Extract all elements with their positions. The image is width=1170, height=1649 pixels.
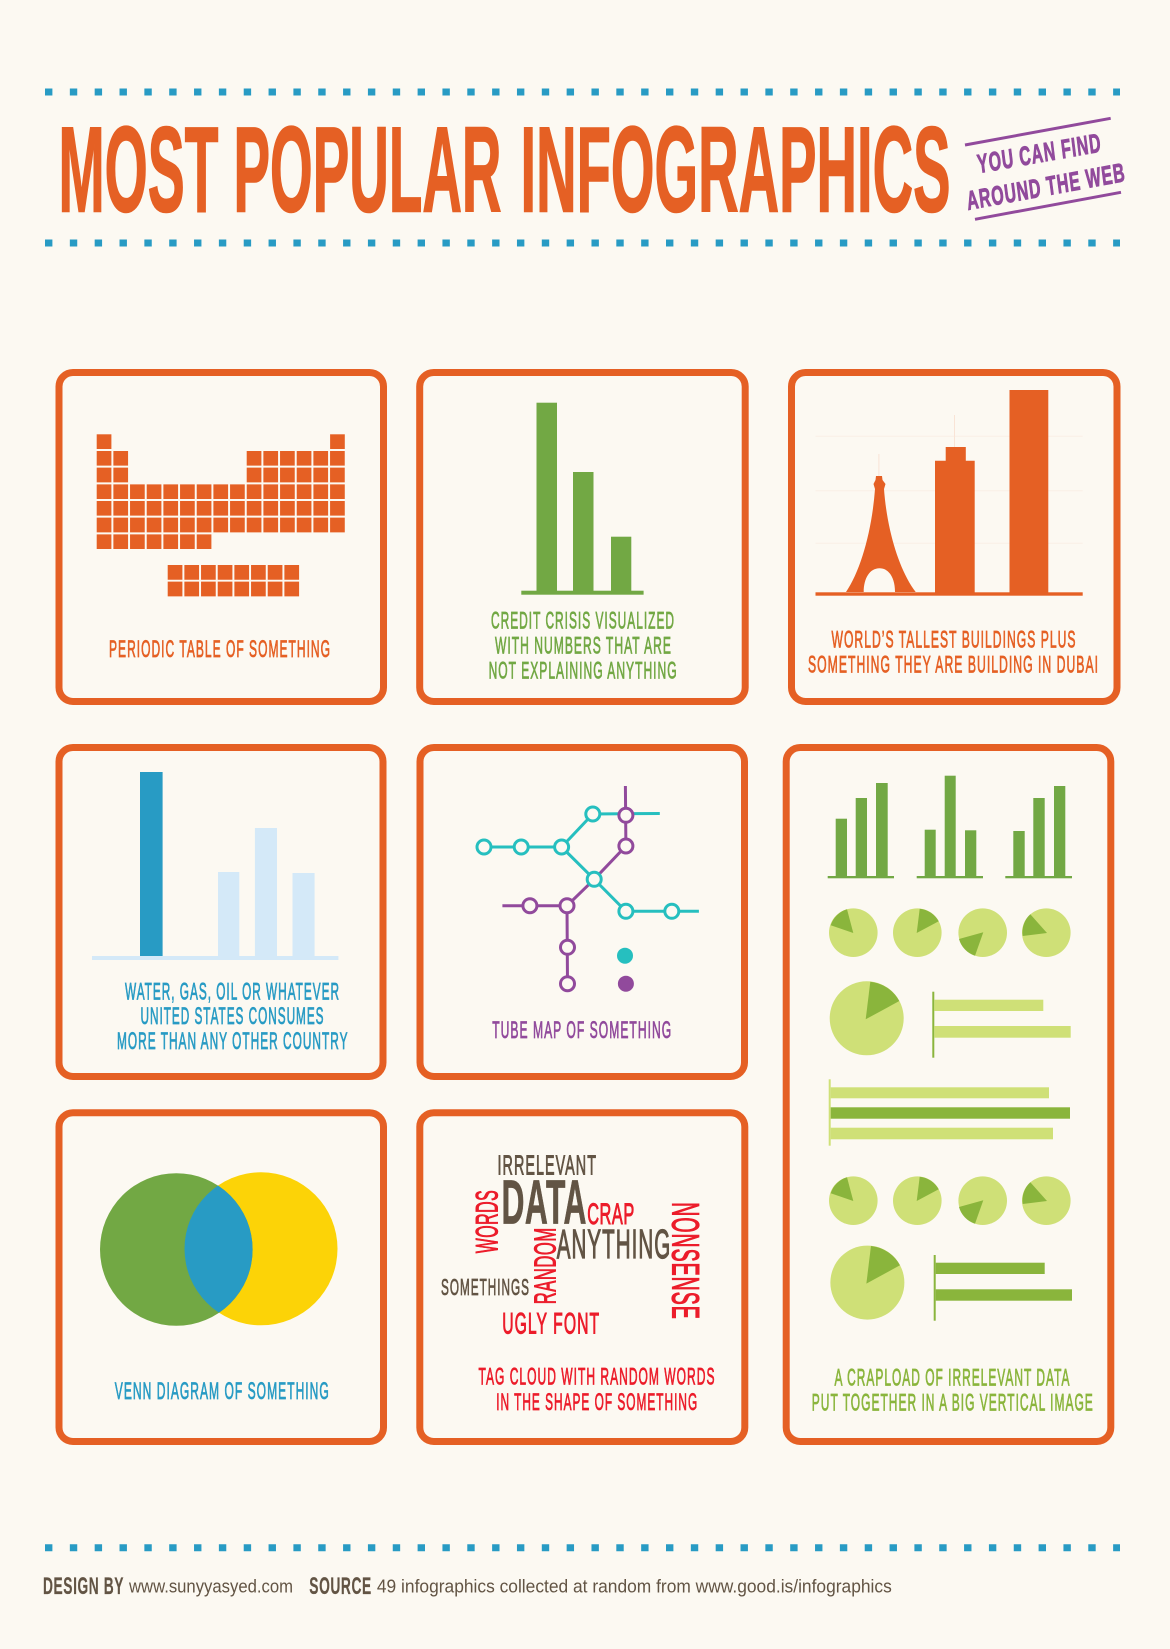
chart: tag cloud: IRRELEVANT (498, 1150, 597, 1181)
caption: consumption: WATER, GAS, OIL OR WHATEVER (125, 978, 340, 1005)
panel: crapload of data (786, 748, 1111, 1442)
chart: tag cloud: NONSENSE (663, 1202, 705, 1320)
caption: credit crisis (489, 608, 678, 685)
footer credits: DESIGN BY (43, 1573, 124, 1600)
chart: pie row one (829, 908, 1071, 957)
title: POPULAR (234, 102, 502, 238)
chart: periodic table grid (97, 442, 345, 589)
chart: tag cloud: RANDOM (528, 1227, 563, 1304)
caption: consumption: UNITED STATES CONSUMES (140, 1003, 324, 1030)
icon: eiffel tower (846, 476, 916, 592)
chart: tag cloud: DATA (502, 1167, 587, 1237)
caption: tag cloud (478, 1364, 716, 1416)
caption: credit crisis: CREDIT CRISIS VISUALIZED (491, 608, 675, 635)
panel: tallest buildings (792, 372, 1117, 702)
footer credits: 49 infographics collected at random from www.good.is/infographics (377, 1576, 892, 1596)
footer credits: SOURCE (309, 1573, 372, 1600)
panel: consumption: MORE THAN ANY OTHER COUNTRY (117, 1028, 348, 1055)
chart: tag cloud: UGLY FONT (502, 1307, 600, 1340)
chart: pie row two (829, 1176, 1071, 1225)
chart: large pie one (830, 981, 904, 1055)
chart: large pie two (830, 1246, 904, 1320)
chart: tag cloud (441, 1150, 705, 1340)
subtitle: you can find around the web (965, 118, 1127, 219)
icon: skyscraper (935, 447, 975, 593)
panel: tube map (420, 748, 744, 1076)
chart: tag cloud: ANYTHING (557, 1221, 671, 1267)
caption: periodic table: PERIODIC TABLE OF SOMETHING (109, 636, 331, 663)
chart: credit crisis bars (521, 403, 644, 595)
caption: consumption (117, 978, 348, 1055)
panel: venn diagram (59, 1113, 384, 1442)
panel: tag cloud (420, 1113, 745, 1442)
caption: tube map: TUBE MAP OF SOMETHING (492, 1017, 672, 1044)
caption: tag cloud: IN THE SHAPE OF SOMETHING (496, 1389, 698, 1416)
panel: periodic table (59, 372, 384, 702)
footer credits: www.sunyyasyed.com (128, 1576, 293, 1596)
caption: venn diagram: VENN DIAGRAM OF SOMETHING (115, 1378, 330, 1405)
chart: venn diagram (100, 1172, 338, 1326)
caption: tallest buildings (808, 626, 1099, 678)
footer credits (43, 1573, 892, 1600)
caption: credit crisis: WITH NUMBERS THAT ARE (495, 632, 672, 660)
chart: tube map (477, 786, 699, 992)
title (58, 102, 950, 238)
chart: consumption bars (92, 772, 338, 960)
chart: three small bar charts (828, 776, 1072, 878)
panel: consumption (59, 748, 383, 1076)
caption: credit crisis: NOT EXPLAINING ANYTHING (489, 658, 678, 685)
chart: tag cloud: SOMETHINGS (441, 1274, 530, 1300)
chart: tag cloud: CRAP (587, 1198, 635, 1231)
chart: tag cloud: WORDS (469, 1190, 505, 1253)
title: MOST (58, 102, 218, 238)
caption: tag cloud: TAG CLOUD WITH RANDOM WORDS (478, 1364, 716, 1391)
chart: light horizontal bars (932, 992, 1071, 1058)
icon: dubai tower bar (1010, 390, 1048, 593)
chart: long horizontal bars (829, 1079, 1070, 1146)
caption: crapload of data (812, 1364, 1094, 1416)
panel: credit crisis (420, 372, 745, 702)
chart: dark horizontal bars (934, 1255, 1072, 1321)
